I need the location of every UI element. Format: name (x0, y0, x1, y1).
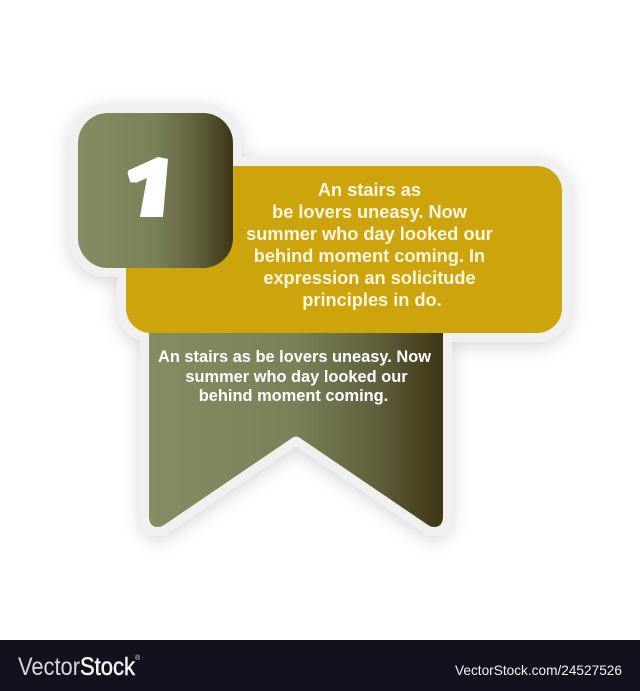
footer background (0, 640, 640, 691)
yellow panel text: behind moment coming. In (254, 246, 485, 266)
ribbon text line 1: An stairs as be lovers uneasy. Now (158, 348, 431, 366)
number 1: 1 (119, 127, 165, 237)
ribbon shape (149, 333, 443, 527)
yellow panel (126, 166, 562, 333)
footer bar (0, 640, 640, 691)
yellow box (126, 166, 562, 333)
badge square (78, 113, 233, 268)
footer logo (18, 653, 135, 681)
white sticker outline with shadow (78, 113, 562, 527)
footer logo: Vector (18, 653, 80, 681)
yellow panel text: summer who day looked our (246, 224, 493, 244)
yellow panel text: An stairs as (318, 180, 421, 200)
registered mark: ® (135, 654, 141, 662)
footer url: VectorStock.com/24527526 (455, 662, 622, 678)
number badge (78, 113, 233, 268)
yellow panel text: be lovers uneasy. Now (272, 202, 468, 222)
ribbon text line 2: summer who day looked our (185, 368, 408, 386)
yellow panel text: expression an solicitude (263, 268, 476, 288)
yellow panel text: principles in do. (302, 290, 442, 310)
ribbon text line 3: behind moment coming. (199, 387, 388, 405)
footer logo: Stock (80, 653, 135, 681)
